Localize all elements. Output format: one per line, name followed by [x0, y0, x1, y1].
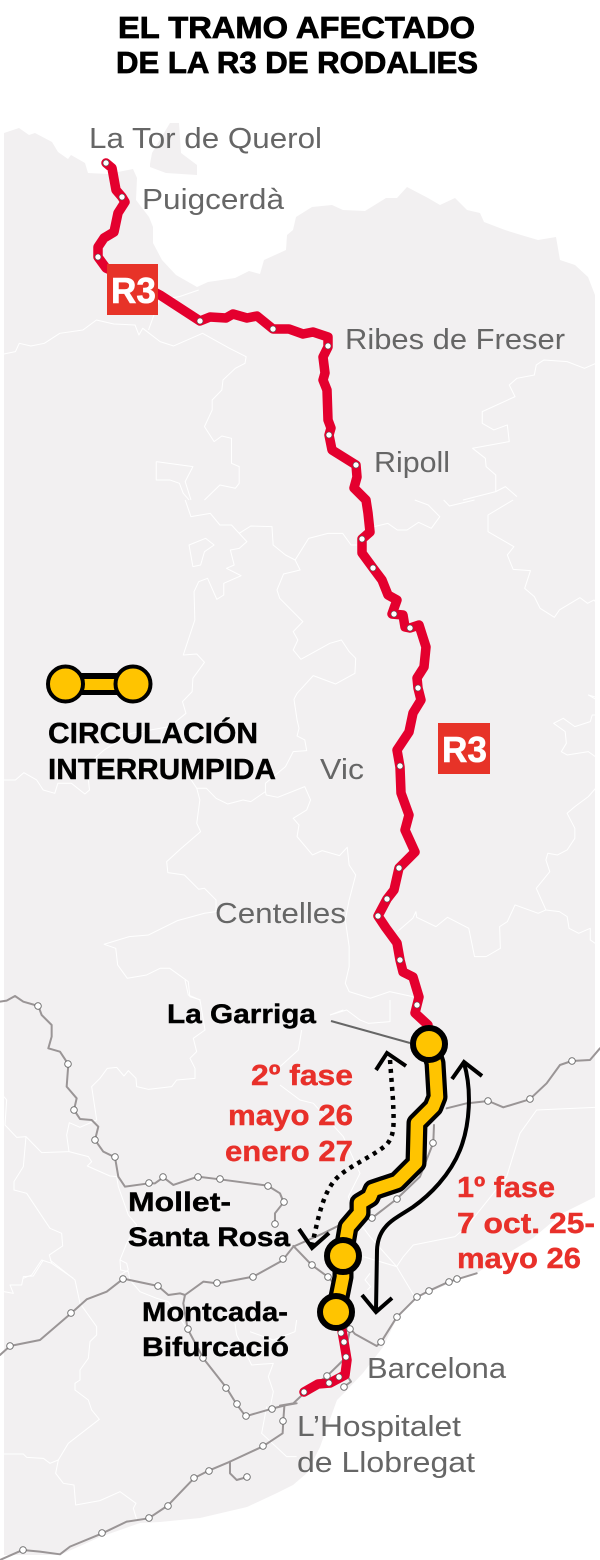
station: Mollet-Santa Rosa [327, 1240, 359, 1272]
phase 1 label: mayo 26 [457, 1243, 581, 1275]
interrupted section: yellow line [336, 1044, 437, 1312]
phase 1 label [457, 1172, 595, 1275]
La Garriga leader line [331, 1021, 410, 1043]
phase 1 label: 1º fase [457, 1172, 555, 1204]
station labels: Mollet- [128, 1187, 231, 1217]
station labels: Bifurcació [142, 1332, 289, 1362]
legend label: CIRCULACIÓN [48, 716, 258, 750]
place labels: La Tor de Querol [89, 123, 322, 155]
title: DE LA R3 DE RODALIES [116, 45, 478, 80]
grey stations [7, 1003, 575, 1553]
legend label [48, 716, 276, 786]
phase 2 label: enero 27 [225, 1136, 353, 1168]
R3 badge middle: R3 [442, 729, 487, 770]
place labels: L’Hospitalet [297, 1411, 461, 1443]
place labels [89, 123, 565, 1479]
regional boundaries [4, 290, 600, 1519]
station labels: Santa Rosa [128, 1222, 291, 1252]
arrow: phase 2 [299, 1053, 406, 1248]
R3 badge top: R3 [111, 270, 156, 311]
title: EL TRAMO AFECTADO [118, 10, 475, 45]
arrow: phase 1 [362, 1062, 482, 1312]
title [116, 10, 478, 80]
place labels: Puigcerdà [142, 184, 285, 216]
station: La Garriga [413, 1028, 445, 1060]
place labels: de Llobregat [297, 1447, 475, 1479]
legend: interrupted line [48, 666, 150, 702]
station: Montcada-Bifurcació [320, 1296, 352, 1328]
phase 1 label: 7 oct. 25- [457, 1208, 595, 1240]
legend label: INTERRUMPIDA [48, 754, 276, 786]
place labels: Ribes de Freser [345, 324, 565, 356]
phase 2 label: 2º fase [251, 1060, 353, 1092]
red R3 line [98, 163, 428, 1392]
station labels: Montcada- [142, 1297, 288, 1327]
phase 2 label [225, 1060, 353, 1168]
station labels: La Garriga [167, 999, 317, 1029]
place labels: Ripoll [374, 447, 450, 479]
place labels: Centelles [215, 898, 346, 930]
grey railway network [0, 996, 600, 1560]
phase 2 label: mayo 26 [228, 1100, 353, 1132]
place labels: Vic [320, 754, 364, 786]
station labels [128, 999, 317, 1362]
place labels: Barcelona [367, 1353, 507, 1385]
stations on red line [95, 160, 421, 1395]
